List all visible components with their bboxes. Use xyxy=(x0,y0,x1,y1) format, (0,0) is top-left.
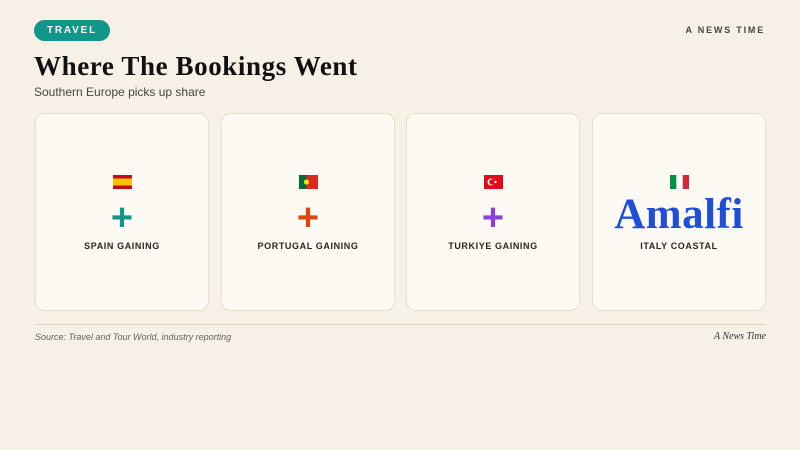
card: turkiye xyxy=(406,113,580,311)
source: Source: Travel and Tour World, industry reporting xyxy=(35,332,231,342)
icon: turkiye flag xyxy=(484,175,503,189)
tag: travel: TRAVEL xyxy=(47,25,97,36)
label: SPAIN GAINING xyxy=(84,241,160,251)
plus: + xyxy=(482,197,504,239)
subtitle: Southern Europe picks up share xyxy=(34,85,205,99)
label: PORTUGAL GAINING xyxy=(258,241,358,251)
plus: + xyxy=(297,197,319,239)
title: Where The Bookings Went xyxy=(34,51,358,81)
big word: Amalfi xyxy=(614,191,744,238)
brand: A NEWS TIME xyxy=(686,25,765,35)
card: spain xyxy=(35,113,209,311)
plus: + xyxy=(111,197,133,239)
label: ITALY COASTAL xyxy=(640,241,718,251)
tag: travel xyxy=(34,20,110,41)
icon: italy flag xyxy=(670,175,689,189)
icon: portugal flag xyxy=(299,175,318,189)
label: TURKIYE GAINING xyxy=(448,241,538,251)
footer brand: A News Time xyxy=(714,331,766,342)
card: portugal xyxy=(221,113,395,311)
card: italy xyxy=(592,113,766,311)
icon: spain flag xyxy=(113,175,132,189)
